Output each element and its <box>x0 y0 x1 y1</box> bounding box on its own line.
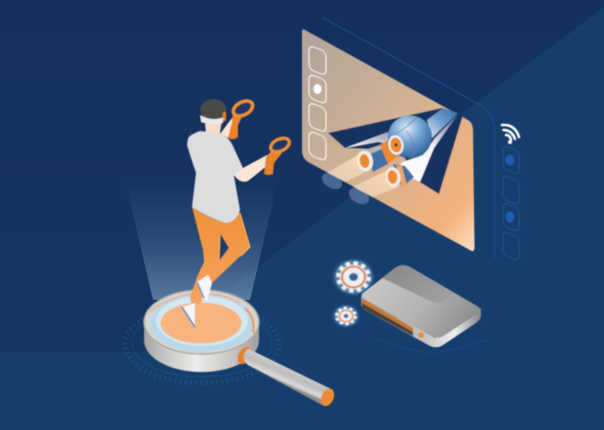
shirt <box>187 131 243 223</box>
person <box>182 98 292 327</box>
panel <box>302 29 474 251</box>
lower engine <box>384 164 414 188</box>
icon: wifi <box>502 125 519 144</box>
spaceship <box>327 108 458 197</box>
engine beam shadows <box>319 169 372 208</box>
device rear inset <box>382 265 453 303</box>
light cone <box>125 180 278 300</box>
device vent <box>362 298 413 332</box>
magnifier collar <box>235 344 254 367</box>
engine beams <box>327 155 398 197</box>
ship nose <box>427 108 458 138</box>
upper engine <box>355 137 400 173</box>
large gear <box>334 260 372 294</box>
shoe upper <box>197 275 212 302</box>
left menu buttons <box>309 45 326 161</box>
lower controller <box>264 135 292 175</box>
small gear <box>334 306 358 326</box>
magnifying glass <box>144 290 337 408</box>
front arm <box>234 155 273 182</box>
device led <box>418 332 424 338</box>
projector device <box>361 265 487 355</box>
magnifier handle <box>244 349 337 408</box>
ship cockpit ball <box>387 116 432 158</box>
right status buttons <box>503 145 519 261</box>
pants <box>190 207 250 303</box>
radial tick ring <box>125 305 279 383</box>
lower leg in lens <box>190 296 203 305</box>
ship left wing <box>345 132 392 148</box>
projected screen panel <box>302 29 474 251</box>
device front and side <box>361 296 481 347</box>
back arm and upper controller <box>220 98 255 139</box>
leg gap <box>219 233 229 261</box>
device top <box>362 265 480 338</box>
spaceship window <box>328 108 463 194</box>
magnifier body <box>144 290 259 372</box>
ship right wing <box>395 114 458 182</box>
shoe lower <box>182 303 195 327</box>
hologram frame line <box>322 17 495 258</box>
head with headset <box>200 99 226 133</box>
